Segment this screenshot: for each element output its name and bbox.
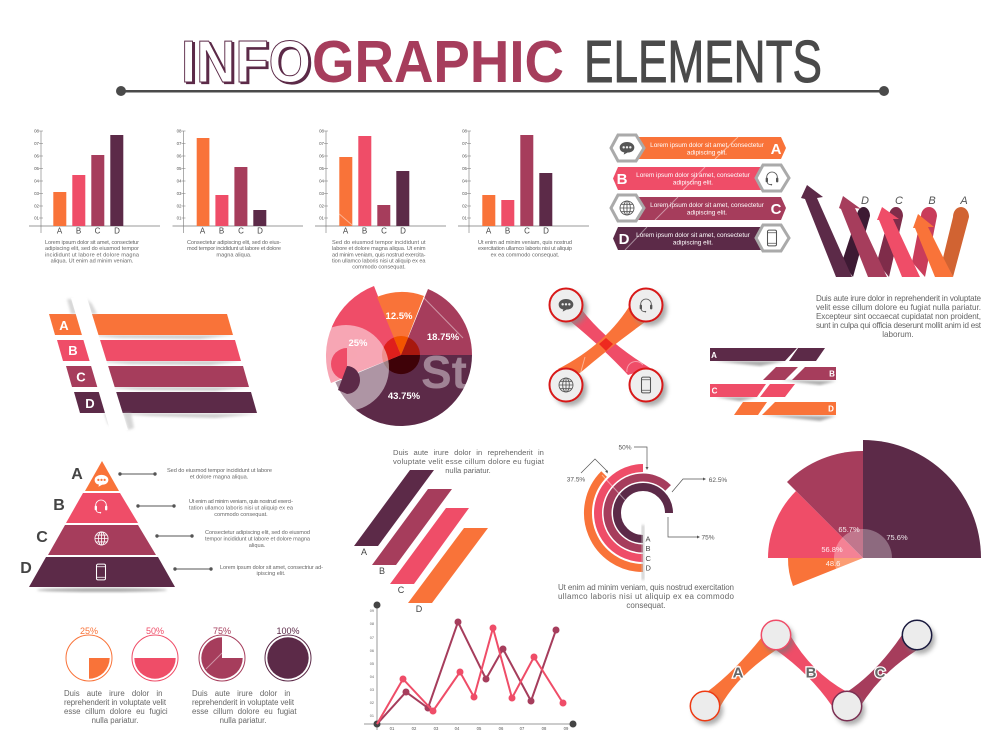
bar chart 4 (458, 128, 589, 258)
parallelogram caption (393, 448, 545, 475)
caption left (64, 689, 168, 725)
bar chart 1: 06 (34, 154, 40, 158)
hexagon banner C: C (771, 201, 782, 218)
bar chart 4: 04 (462, 178, 468, 184)
bar chart 3: labore et dolore magna aliqua. Ut enim (332, 246, 426, 252)
bar chart 4: 06 (462, 154, 468, 158)
pie chart (303, 286, 472, 426)
bar chart 2: 07 (177, 141, 182, 146)
pyramid (20, 461, 323, 592)
bar chart 1: 07 (34, 141, 40, 146)
title: INFO (181, 29, 311, 95)
arc caption: consequat. (626, 601, 666, 610)
parallelogram caption: nulla pariatur. (445, 466, 491, 475)
bar chart 2: B (219, 226, 224, 236)
bar chart 2: 04 (177, 178, 182, 184)
fan chart: 56.8% (821, 545, 843, 554)
bar chart 2: 06 (177, 154, 182, 158)
bar chart 3: Sed do eiusmod tempor incididunt ut (332, 240, 426, 246)
wave connector A-B-C: C (875, 664, 886, 682)
X-shaped connector with icons (550, 288, 667, 406)
hexagon banner A: Lorem ipsum dolor sit amet, consectetur (650, 142, 765, 149)
bar chart 3 (315, 128, 446, 270)
arc caption: Ut enim ad minim veniam, quis nostrud exercitation (558, 583, 734, 592)
percent circle 100% (265, 626, 311, 681)
bar chart 3: C (381, 226, 387, 236)
title: GRAPHIC (312, 29, 564, 95)
caption right: esse cillum dolore eu fugiat (192, 707, 297, 716)
line chart: 09 (370, 609, 374, 613)
bar chart 3: D (400, 226, 406, 236)
title (181, 29, 822, 96)
arc labels: A (646, 534, 651, 544)
fan chart: 48.6 (826, 559, 840, 568)
bar chart 1: 04 (34, 178, 40, 184)
arrow labels: A (959, 195, 968, 207)
arrows caption (816, 294, 982, 339)
pie chart: St (421, 346, 467, 398)
bar chart 3: B (362, 226, 367, 236)
pyramid leader lines (119, 473, 212, 570)
caption left: Duis aute irure dolor in (64, 689, 162, 698)
bar chart 1: B (76, 226, 81, 236)
pyramid letters: A (71, 466, 83, 483)
arrow D plum (801, 185, 852, 277)
pyramid letters (20, 466, 83, 577)
line chart: 08 (370, 622, 374, 626)
icon circle: phone (630, 368, 662, 402)
bar chart 2 (172, 128, 303, 258)
bar chart 2: 08 (177, 128, 182, 134)
parallelogram bars: C (398, 585, 405, 595)
bar chart 3: 06 (319, 154, 325, 158)
bar chart 3: 04 (319, 178, 325, 184)
arrows caption: Excepteur sint occaecat cupidatat non proident, (816, 312, 981, 321)
watermark disc (303, 325, 389, 411)
hexagon banner D (613, 225, 789, 251)
line chart: 05 (477, 726, 482, 731)
arc percentages: 62.5% (709, 477, 727, 484)
line chart: 03 (434, 726, 439, 731)
arrows caption: sunt in culpa qui officia deserunt mollit anim id est (816, 321, 982, 330)
bar chart 4: Ut enim ad minim veniam, quis nostrud (478, 240, 572, 246)
bar chart 4: 07 (462, 141, 468, 146)
bar chart 2: 03 (177, 191, 182, 196)
pyramid letters: C (36, 529, 48, 546)
arc leaders (581, 447, 704, 537)
line chart: 01 (370, 714, 374, 718)
bar chart 4: 05 (462, 166, 468, 171)
bar chart 1: D (114, 226, 120, 236)
hexagon banner A: adipiscing elit. (687, 150, 727, 156)
bar chart 4: exercitation ullamco laboris nisi ut aliquip (478, 246, 572, 252)
bar chart 2: 02 (177, 204, 182, 208)
bar chart 1: Lorem ipsum dolor sit amet, consectetur (45, 240, 139, 246)
bar chart 4: 03 (462, 191, 468, 196)
hexagon banner B: adipiscing elit. (673, 180, 713, 186)
arc percentages: 75% (701, 534, 715, 542)
caption left: esse cillum dolore eu fugici (64, 707, 168, 716)
arrow labels: C (895, 195, 903, 207)
bar chart 4: A (486, 226, 492, 236)
concentric arc chart (567, 444, 727, 580)
arrow labels: B (928, 195, 936, 207)
bar chart 4: D (543, 226, 549, 236)
title: ELEMENTS (584, 29, 822, 95)
arc percentages: 37.5% (567, 476, 585, 484)
pyramid notes: ipiscing elit. (257, 571, 286, 577)
slanted stripes A-D: B (68, 343, 78, 358)
caption right: reprehenderit in voluptate velit (192, 698, 295, 707)
line chart: 02 (370, 701, 374, 705)
parallelogram bars: B (379, 566, 385, 576)
bar chart 1: incididunt ut labore et dolore magna (45, 252, 140, 258)
bar chart 1: adipiscing elit, sed do eiusmod tempor (45, 246, 139, 252)
hexagon banner D: D (619, 231, 630, 248)
wave connector A-B-C: A (733, 664, 744, 682)
pyramid notes: tation ullamco laboris nisi ut aliquip ex ea (189, 506, 294, 512)
percent circle 25% (66, 626, 112, 681)
wave connector A-B-C: B (806, 664, 817, 682)
slanted stripes A-D: C (76, 370, 86, 384)
split ribbons A-D: C (712, 386, 718, 396)
hexagon banner D: Lorem ipsum dolor sit amet, consectetur (636, 232, 751, 239)
arrows caption: velit esse cillum dolore eu fugiat nulla pariatur. (816, 303, 981, 312)
parallelogram caption: voluptate velit esse cillum dolore eu fugiat (393, 457, 545, 466)
hexagon banner B: Lorem ipsum dolor sit amet, consectetur (636, 172, 751, 179)
bar chart 2: D (257, 226, 263, 236)
bar chart 3: A (343, 226, 349, 236)
arc labels (646, 534, 652, 572)
arc percentages (567, 444, 727, 542)
series rose (377, 618, 560, 724)
series pink (377, 624, 566, 724)
pyramid notes: commodo consequat. (214, 512, 268, 518)
pyramid letters: B (53, 497, 65, 514)
arrow back legs (842, 207, 969, 277)
title: INFO (183, 30, 313, 96)
percent circle 50%: 50% (146, 626, 164, 636)
arrow labels (861, 195, 968, 207)
caption left: nulla pariatur. (92, 716, 138, 725)
pyramid letters: D (20, 560, 32, 577)
bar chart 3: 02 (319, 204, 325, 208)
pyramid notes: Ut enim ad minim veniam, quis nostrud exerci- (189, 499, 293, 505)
slanted stripes A-D: A (59, 318, 69, 333)
bar chart 1 (29, 128, 160, 264)
bar chart 3: tion ullamco laboris nisi ut aliquip ex ea (332, 258, 426, 264)
line chart: 04 (455, 726, 460, 731)
split ribbons A-D: B (829, 370, 835, 378)
bar chart 1: 05 (34, 166, 40, 171)
line chart: 08 (542, 726, 547, 731)
percent circle 50% (132, 626, 178, 681)
bar chart 3: 08 (319, 128, 325, 134)
pyramid notes: et dolore magna aliqua. (190, 474, 249, 480)
bar chart 1: 08 (34, 128, 40, 134)
line chart: 04 (370, 675, 374, 679)
arc percentages: 50% (618, 444, 632, 452)
arrow A orange (913, 214, 953, 277)
line chart: 07 (520, 726, 525, 731)
bar chart 1: C (95, 226, 101, 236)
bar chart 1: A (57, 226, 63, 236)
title rule with end dots (116, 86, 889, 96)
split ribbons A-D: A (711, 351, 717, 360)
bar chart 3: ad minim veniam, quis nostrud exercita- (332, 252, 426, 258)
bar chart 2: magna aliqua. (216, 252, 252, 258)
arc leader arrowheads (605, 467, 706, 538)
percent circle 25%: 25% (80, 626, 98, 636)
bar chart 4: ex ea commodo consequat. (491, 252, 560, 258)
parallelogram bars (354, 470, 488, 614)
icon circle: globe (550, 368, 582, 402)
line chart (364, 602, 576, 731)
hexagon banner D: adipiscing elit. (673, 240, 713, 246)
arrows caption: Duis aute irure dolor in reprehenderit in voluptate (816, 294, 981, 303)
hexagon banner A: A (771, 141, 782, 158)
pie chart: 43.75% (388, 391, 421, 402)
percent circle 100%: 100% (276, 626, 300, 636)
arrow C rose (839, 196, 887, 277)
fan chart: 75.6% (886, 533, 908, 542)
line chart: 09 (564, 726, 569, 731)
line chart: 05 (370, 662, 374, 666)
icon circle: headset (630, 288, 662, 322)
caption left: reprehenderit in voluptate velit (64, 698, 167, 707)
bar chart 1: 03 (34, 191, 40, 196)
split ribbons A-D: D (828, 404, 834, 414)
pyramid notes: aliqua. (249, 543, 266, 549)
arc caption: ullamco laboris nisi ut aliquip ex ea commodo (558, 592, 735, 601)
percent circle 75% (199, 626, 245, 681)
fan chart (768, 440, 981, 586)
bar chart 4: 01 (462, 216, 468, 220)
bar chart 4: C (524, 226, 530, 236)
pyramid notes (167, 468, 323, 577)
bar chart 2: C (238, 226, 244, 236)
bar chart 2: Consectetur adipiscing elit, sed do eius- (187, 240, 281, 246)
caption right: nulla pariatur. (220, 716, 266, 725)
bar chart 3: 07 (319, 141, 325, 146)
pyramid notes: Sed do eiusmod tempor incididunt ut labore (167, 468, 272, 474)
caption right: Duis aute irure dolor in (192, 689, 290, 698)
pie chart: 25% (348, 338, 368, 349)
pyramid notes: tempor incididunt ut labore et dolore magna (205, 536, 311, 542)
icon circle: chat (550, 288, 582, 322)
hexagon banner C (611, 195, 786, 221)
bar chart 2: A (200, 226, 206, 236)
arc labels: D (646, 564, 652, 572)
hexagon banner A (611, 135, 786, 161)
hexagon banner B (613, 165, 789, 191)
parallelogram bars: A (361, 547, 367, 557)
pie chart: 12.5% (386, 311, 413, 322)
hexagon banner C: Lorem ipsum dolor sit amet, consectetur (650, 202, 765, 209)
parallelogram bars: D (416, 604, 423, 614)
bar chart 3: 01 (319, 216, 325, 220)
bar chart 1: aliqua. Ut enim ad minim veniam. (51, 258, 134, 264)
bar chart 4: 08 (462, 128, 468, 134)
line chart: 06 (499, 726, 504, 731)
bar chart 3: 03 (319, 191, 325, 196)
parallelogram caption: Duis aute irure dolor in reprehenderit in (393, 448, 544, 457)
bar chart 4: B (505, 226, 510, 236)
slanted stripes A-D (49, 298, 257, 430)
split ribbons A-D (710, 348, 836, 421)
bar chart 4: 02 (462, 204, 468, 208)
pyramid icons (95, 475, 108, 580)
bar chart 2: 05 (177, 166, 182, 171)
line chart: 03 (370, 688, 374, 692)
bar chart 1: 01 (34, 216, 40, 220)
hexagon banner C: adipiscing elit. (687, 210, 727, 216)
bar chart 3: commodo consequat. (352, 264, 406, 270)
fan chart: 65.7% (838, 525, 860, 534)
bar chart 3: 05 (319, 166, 325, 171)
line chart: 01 (390, 726, 395, 731)
arc labels: C (646, 554, 652, 563)
pie chart: 18.75% (427, 332, 460, 343)
arrow labels: D (861, 195, 869, 207)
arc labels: B (646, 544, 651, 553)
bar chart 2: 01 (177, 216, 182, 220)
line chart: 02 (412, 726, 417, 731)
line chart: 07 (370, 636, 374, 640)
slanted stripes A-D: D (85, 396, 95, 411)
zigzag arrows chart (801, 185, 969, 277)
wave connector A-B-C (690, 620, 935, 725)
bar chart 1: 02 (34, 204, 40, 208)
bar chart 2: mod tempor incididunt ut labore et dolore (187, 246, 281, 252)
pyramid notes: Consectetur adipiscing elit, sed do eiusmod (205, 530, 310, 536)
line chart: 06 (370, 649, 374, 653)
pyramid notes: Lorem ipsum dolor sit amet, consectriur ad- (220, 565, 323, 571)
arrow B pink (877, 207, 920, 277)
percent circle 75%: 75% (213, 626, 231, 636)
arrows caption: laborum. (882, 330, 914, 339)
arc caption (558, 583, 735, 610)
hexagon banner B: B (617, 171, 628, 188)
caption right (192, 689, 297, 725)
